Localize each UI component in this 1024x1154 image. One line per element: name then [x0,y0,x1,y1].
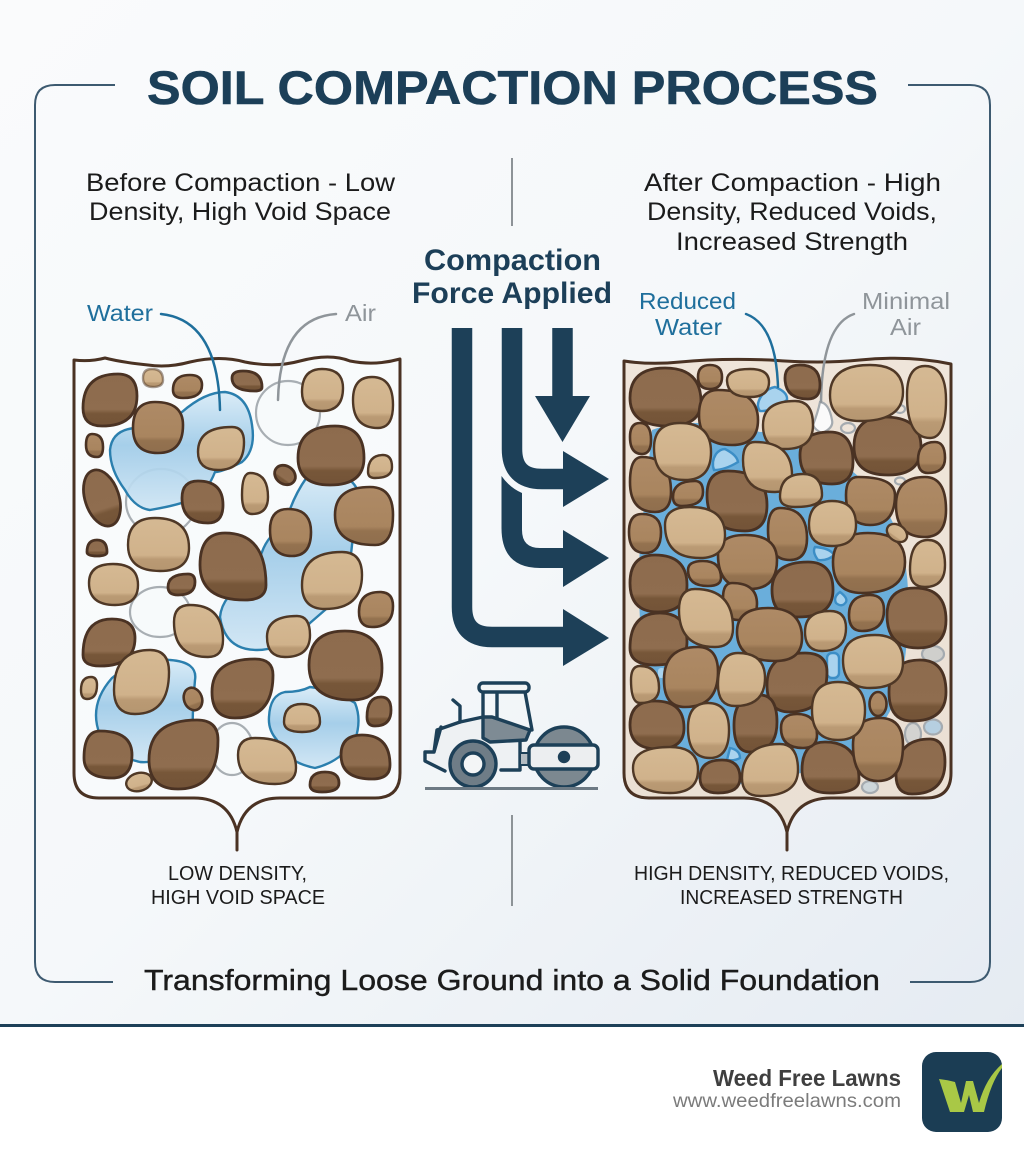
stones before: light [81,369,393,794]
arrow: middle right [502,476,609,587]
caption: low density: LOW DENSITY, [168,863,307,885]
label: minimal air: Minimal [862,288,950,314]
label: minimal air: Air [890,314,921,340]
label: water: Water [87,300,153,326]
caption: high density: INCREASED STRENGTH [680,887,903,909]
arrow: upper right [512,328,609,507]
tagline: Transforming Loose Ground into a Solid Foundation [144,965,880,997]
stones after: dark [630,365,946,794]
label: reduced water: Reduced [639,288,736,314]
arrows: compaction force [462,328,609,666]
heading: compaction force applied: Force Applied [412,277,612,310]
stones before: dark [77,371,391,792]
callout line: reduced water [746,314,778,387]
caption: high density: HIGH DENSITY, REDUCED VOIDS, [634,863,949,885]
heading: compaction force applied: Compaction [424,244,601,277]
label: reduced water [639,288,736,340]
footer [0,1024,1024,1154]
heading: after compaction [644,169,941,256]
logo [922,1052,1002,1132]
callout line: minimal air [821,314,854,402]
stones after: medium [629,365,946,781]
air pockets after [813,402,944,793]
stones before: medium [86,375,393,713]
center divider bottom [511,815,513,906]
water pools before [96,392,359,768]
caption: low density: HIGH VOID SPACE [151,887,325,909]
website: www.weedfreelawns.com [672,1090,901,1112]
center divider top [511,158,513,226]
air pockets before [126,381,320,775]
heading: after compaction: After Compaction - High [644,169,941,197]
heading: after compaction: Increased Strength [676,228,908,256]
heading: before compaction [86,169,396,226]
panel: before compaction [74,314,400,850]
callout line: air [278,314,336,400]
caption: low density [151,863,325,909]
heading: before compaction: Density, High Void Space [89,198,391,226]
heading: before compaction: Before Compaction - Low [86,169,396,197]
label: minimal air [862,288,950,340]
arrow: straight down [535,328,590,442]
title: SOIL COMPACTION PROCESS [147,61,878,114]
stones after: light [631,365,946,796]
brand name: Weed Free Lawns [713,1065,901,1091]
label: reduced water: Water [655,314,722,340]
water pockets after [658,387,846,760]
caption: high density [634,863,949,909]
soil container before [74,357,400,850]
panel: after compaction [624,314,951,850]
heading: after compaction: Density, Reduced Voids, [647,198,937,226]
arrow: lower right [462,328,609,666]
icon: road roller [425,683,598,788]
water filling the gaps [639,423,908,785]
outer frame [35,85,990,982]
label: air: Air [345,300,376,326]
soil container after [624,358,951,850]
callout line: water [161,314,220,410]
heading: compaction force applied [412,244,612,310]
